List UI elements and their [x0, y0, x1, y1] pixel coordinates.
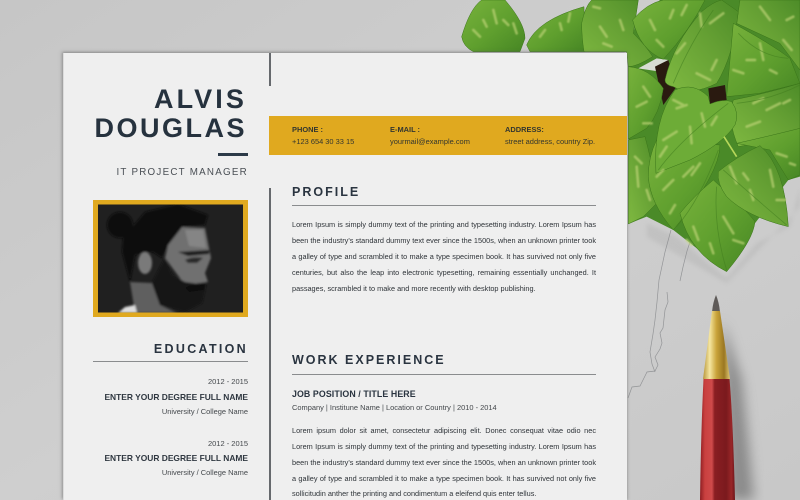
leaf variegation: [473, 5, 795, 253]
job title: IT PROJECT MANAGER: [116, 167, 248, 178]
phone: +123 654 30 33 15: [292, 137, 354, 146]
first name: ALVIS: [154, 84, 247, 114]
education rule: [93, 361, 248, 362]
name underline: [218, 153, 248, 156]
pen red body: [700, 379, 735, 500]
ear: [138, 252, 152, 274]
name heading: [94, 84, 247, 143]
vertical divider top: [269, 53, 270, 86]
paper edge: [63, 53, 64, 500]
mustache: [185, 283, 206, 292]
shoulder: [118, 305, 137, 313]
university: University / College Name: [162, 468, 248, 477]
work text: sollicitudin anther the printing and condimentum a eleifend quis enter tellus.: [292, 489, 536, 498]
beard: [152, 258, 206, 312]
contact bar: [269, 116, 627, 155]
work text: [292, 426, 596, 498]
last name: DOUGLAS: [94, 113, 247, 143]
neck: [130, 282, 177, 313]
leaf midribs: [658, 10, 800, 270]
profile text: been the industry's standard dummy text ever since the 1500s, when an unknown printer took: [292, 236, 596, 245]
dates: 2012 - 2015: [208, 439, 248, 448]
work text: Lorem ipsum dolor sit amet, consectetur adipiscing elit. Donec consequat vitae odio nec: [292, 426, 596, 435]
pen tip: [712, 295, 720, 312]
work text: Lorem Ipsum is simply dummy text of the printing and typesetting industry. Lorem Ipsum has: [292, 442, 596, 451]
degree: ENTER YOUR DEGREE FULL NAME: [104, 453, 248, 463]
phone: [292, 125, 354, 146]
job title: JOB POSITION / TITLE HERE: [292, 389, 416, 399]
address: [505, 125, 595, 146]
email: [390, 125, 470, 146]
hair: [122, 204, 208, 282]
work rule: [292, 374, 596, 375]
soil right: [708, 85, 727, 104]
education entry 1: [104, 377, 248, 416]
degree: ENTER YOUR DEGREE FULL NAME: [104, 392, 248, 402]
dates: 2012 - 2015: [208, 377, 248, 386]
email: E-MAIL :: [390, 125, 420, 134]
address: street address, country Zip.: [505, 137, 595, 146]
resume paper: [63, 53, 627, 500]
profile photo: [93, 200, 248, 317]
pot rim: [638, 58, 668, 72]
profile text: a galley of type and scrambled it to make a type specimen book. It has survived not only five: [292, 252, 596, 261]
education heading: EDUCATION: [154, 342, 248, 356]
profile rule: [292, 205, 596, 206]
face: [165, 227, 211, 285]
education entry 2: [104, 439, 248, 477]
vertical divider bottom: [269, 188, 270, 500]
profile heading: PROFILE: [292, 185, 360, 199]
soil: [655, 60, 677, 105]
university: University / College Name: [162, 407, 248, 416]
plant shadow: [647, 187, 800, 283]
address: ADDRESS:: [505, 125, 544, 134]
profile text: [292, 220, 596, 293]
email: yourmail@example.com: [390, 137, 470, 146]
company line: Company | Institune Name | Location or Country | 2010 - 2014: [292, 403, 497, 412]
forehead highlight: [185, 230, 206, 248]
work text: a galley of type and scrambled it to make a type specimen book. It has survived not only five: [292, 474, 596, 483]
leaf stem: [724, 137, 737, 157]
profile text: centuries, but also the leap into electronic typesetting, remaining essentially unchanged. It: [292, 268, 596, 277]
hair bun: [107, 212, 133, 238]
profile text: passages, scrambled it to make and more recently with desktop publishing.: [292, 284, 536, 293]
eyebrow: [178, 250, 210, 256]
work experience heading: WORK EXPERIENCE: [292, 353, 446, 367]
work text: been the industry's standard dummy text ever since the 1500s, when an unknown printer took: [292, 458, 596, 467]
plant underlay: [628, 0, 800, 272]
profile text: Lorem Ipsum is simply dummy text of the printing and typesetting industry. Lorem Ipsum has: [292, 220, 596, 229]
pen gold cone: [703, 311, 730, 379]
phone: PHONE :: [292, 125, 323, 134]
eye: [185, 257, 203, 263]
